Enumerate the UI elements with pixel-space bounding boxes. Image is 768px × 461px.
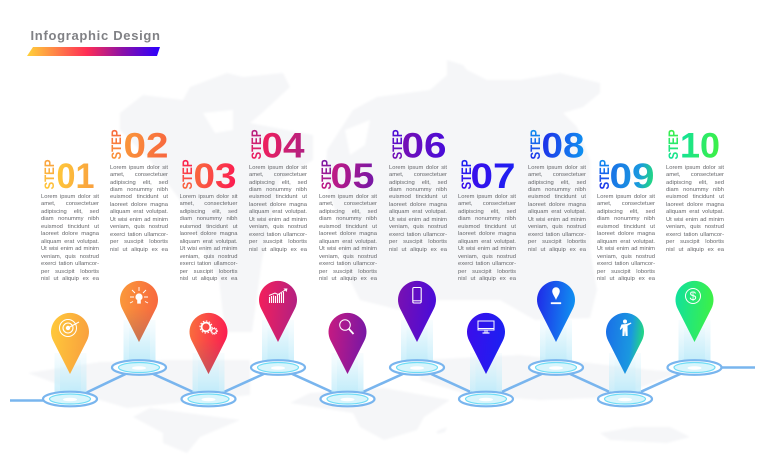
step 8 light beam <box>540 320 572 368</box>
icon: dollar coin: $ <box>690 289 697 303</box>
step 6 text <box>389 165 447 257</box>
step 6 text: veniam, quis nostrud <box>389 224 447 230</box>
step 10 light beam <box>678 320 710 368</box>
step 1 text: amet, consectetuer <box>41 201 99 207</box>
step 8 text: amet, consectetuer <box>528 172 586 178</box>
step 10 text: Ut wisi enim ad minim <box>666 217 724 223</box>
step 3 text: amet, consectetuer <box>180 201 238 207</box>
step 2 text: amet, consectetuer <box>110 172 168 178</box>
timeline track <box>10 368 755 400</box>
step 4 heading: 04 <box>262 126 305 166</box>
step 1 text: nisl ut aliquip ex ea <box>41 276 99 282</box>
step 6 text: per suscipit lobortis <box>389 239 447 245</box>
step 2 text: veniam, quis nostrud <box>110 224 168 230</box>
step 1 text: euismod tincidunt ut <box>41 224 99 230</box>
step 2 heading: 02 <box>124 126 168 166</box>
step 9 text: laoreet dolore magna <box>597 231 655 237</box>
step 5 text: nisl ut aliquip ex ea <box>319 276 377 282</box>
step 2 text <box>110 165 168 257</box>
step 4 text: laoreet dolore magna <box>249 202 307 208</box>
step 8 text <box>528 165 586 257</box>
step 7 text: Lorem ipsum dolor sit <box>458 194 516 200</box>
step 7 text: per suscipit lobortis <box>458 269 516 275</box>
step 10 node <box>668 360 722 375</box>
step 10 text: veniam, quis nostrud <box>666 224 724 230</box>
step 6 text: euismod tincidunt ut <box>389 194 447 200</box>
step 1 text: per suscipit lobortis <box>41 269 99 275</box>
step 9 text: Ut wisi enim ad minim <box>597 246 655 252</box>
step 2 text: euismod tincidunt ut <box>110 194 168 200</box>
step 3 text: Lorem ipsum dolor sit <box>180 194 238 200</box>
step 5 text: adipiscing elit, sed <box>319 209 377 215</box>
step 10 heading: 10 <box>680 126 720 166</box>
step 8 text: nisl ut aliquip ex ea <box>528 247 586 253</box>
step 9 text: nisl ut aliquip ex ea <box>597 276 655 282</box>
step 10 text: adipiscing elit, sed <box>666 180 724 186</box>
step 3 node <box>182 392 236 406</box>
step 8 <box>528 126 586 375</box>
title gradient bar <box>27 47 160 56</box>
step 8 text: exerci tation ullamcor- <box>528 232 586 238</box>
step 7 light beam <box>470 353 502 399</box>
step 7 text: nisl ut aliquip ex ea <box>458 276 516 282</box>
step 5 node <box>320 392 374 406</box>
step 6 pin <box>398 281 436 342</box>
step 6 heading: STEP <box>390 130 405 160</box>
step 8 heading: STEP <box>528 130 543 160</box>
step 6 text: Ut wisi enim ad minim <box>389 217 447 223</box>
step 5 pin <box>328 313 366 374</box>
step 7 text <box>458 194 516 286</box>
step 5 text: Lorem ipsum dolor sit <box>319 194 377 200</box>
step 6 text: aliquam erat volutpat. <box>389 209 447 215</box>
step 6 text: adipiscing elit, sed <box>389 180 447 186</box>
step 5 text: euismod tincidunt ut <box>319 224 377 230</box>
step 2 pin <box>120 281 158 342</box>
step 4 text: amet, consectetuer <box>249 172 307 178</box>
step 10 text: exerci tation ullamcor- <box>666 232 724 238</box>
icon: smartphone <box>413 288 421 303</box>
step 8 text: aliquam erat volutpat. <box>528 209 586 215</box>
step 9 heading: STEP <box>597 160 612 190</box>
step 5 <box>319 157 377 406</box>
step 8 pin <box>537 281 575 342</box>
step 9 <box>597 157 655 406</box>
step 8 node <box>529 360 583 375</box>
step 4 heading <box>249 126 305 166</box>
step 1 pin <box>51 313 89 374</box>
icon: person <box>620 320 631 336</box>
step 10 text: nisl ut aliquip ex ea <box>666 247 724 253</box>
step 6 node <box>390 360 444 375</box>
step 2 text: aliquam erat volutpat. <box>110 209 168 215</box>
step 9 pin <box>606 313 644 374</box>
step 1 text: laoreet dolore magna <box>41 231 99 237</box>
step 2 node <box>112 360 166 375</box>
step 5 text: veniam, quis nostrud <box>319 254 377 260</box>
step 9 heading: 09 <box>610 157 654 196</box>
step 1 light beam <box>54 353 86 399</box>
step 9 heading <box>597 157 654 196</box>
step 2 text: diam nonummy nibh <box>110 187 168 193</box>
step 5 text <box>319 194 377 286</box>
step 1 <box>41 157 99 406</box>
step 4 text: nisl ut aliquip ex ea <box>249 247 307 253</box>
step 3 text: Ut wisi enim ad minim <box>180 246 238 252</box>
step 1 text: Ut wisi enim ad minim <box>41 246 99 252</box>
step 1 text: Lorem ipsum dolor sit <box>41 194 99 200</box>
step 8 heading <box>528 126 584 166</box>
step 3 text: diam nonummy nibh <box>180 216 238 222</box>
icon: gears <box>200 321 217 334</box>
step 6 text: diam nonummy nibh <box>389 187 447 193</box>
step 9 text: aliquam erat volutpat. <box>597 239 655 245</box>
step 9 text: veniam, quis nostrud <box>597 254 655 260</box>
step 8 text: diam nonummy nibh <box>528 187 586 193</box>
step 5 text: diam nonummy nibh <box>319 216 377 222</box>
step 1 node <box>43 392 97 406</box>
step 6 heading <box>390 126 446 166</box>
step 6 text: nisl ut aliquip ex ea <box>389 247 447 253</box>
step 8 text: Ut wisi enim ad minim <box>528 217 586 223</box>
step 4 text: per suscipit lobortis <box>249 239 307 245</box>
step 2 <box>109 126 168 375</box>
step 3 text: aliquam erat volutpat. <box>180 239 238 245</box>
step 2 text: Lorem ipsum dolor sit <box>110 165 168 171</box>
step 10 text: laoreet dolore magna <box>666 202 724 208</box>
step 7 heading <box>459 157 516 196</box>
step 7 pin <box>467 313 505 374</box>
step 3 text: nisl ut aliquip ex ea <box>180 276 238 282</box>
step 10 text: aliquam erat volutpat. <box>666 209 724 215</box>
step 6 text: exerci tation ullamcor- <box>389 232 447 238</box>
icon: growth chart <box>269 288 288 303</box>
step 8 text: euismod tincidunt ut <box>528 194 586 200</box>
step 6 text: laoreet dolore magna <box>389 202 447 208</box>
step 9 text: amet, consectetuer <box>597 201 655 207</box>
step 4 light beam <box>262 320 294 368</box>
step 4 text: veniam, quis nostrud <box>249 224 307 230</box>
step 3 text: euismod tincidunt ut <box>180 224 238 230</box>
step 1 heading: 01 <box>56 157 94 196</box>
step 5 heading: STEP <box>319 160 334 190</box>
step 8 text: veniam, quis nostrud <box>528 224 586 230</box>
step 2 text: adipiscing elit, sed <box>110 180 168 186</box>
step 4 pin <box>259 281 297 342</box>
step 1 text: veniam, quis nostrud <box>41 254 99 260</box>
step 9 text: Lorem ipsum dolor sit <box>597 194 655 200</box>
step 2 light beam <box>124 320 156 368</box>
step 8 text: per suscipit lobortis <box>528 239 586 245</box>
step 3 <box>180 157 238 406</box>
step 7 text: diam nonummy nibh <box>458 216 516 222</box>
step 3 text: exerci tation ullamcor- <box>180 261 238 267</box>
step 5 heading: 05 <box>330 157 374 196</box>
step 2 heading: STEP <box>109 130 124 160</box>
step 10 text: amet, consectetuer <box>666 172 724 178</box>
step 8 text: adipiscing elit, sed <box>528 180 586 186</box>
step 7 text: euismod tincidunt ut <box>458 224 516 230</box>
step 9 text: adipiscing elit, sed <box>597 209 655 215</box>
step 4 text: euismod tincidunt ut <box>249 194 307 200</box>
step 3 light beam <box>192 353 224 399</box>
step 7 text: aliquam erat volutpat. <box>458 239 516 245</box>
step 6 text: amet, consectetuer <box>389 172 447 178</box>
step 2 text: laoreet dolore magna <box>110 202 168 208</box>
step 2 text: nisl ut aliquip ex ea <box>110 247 168 253</box>
step 4 text: diam nonummy nibh <box>249 187 307 193</box>
step 5 light beam <box>332 353 364 399</box>
step 3 pin <box>190 313 228 374</box>
step 7 text: exerci tation ullamcor- <box>458 261 516 267</box>
step 4 text: Lorem ipsum dolor sit <box>249 165 307 171</box>
step 4 heading: STEP <box>249 130 264 160</box>
step 1 text: adipiscing elit, sed <box>41 209 99 215</box>
world map background <box>28 60 690 453</box>
step 9 text: exerci tation ullamcor- <box>597 261 655 267</box>
step 7 heading: STEP <box>459 160 474 190</box>
step 6 text: Lorem ipsum dolor sit <box>389 165 447 171</box>
icon: location marker <box>551 287 561 304</box>
step 7 text: veniam, quis nostrud <box>458 254 516 260</box>
step 9 text: euismod tincidunt ut <box>597 224 655 230</box>
icon: target <box>60 320 79 336</box>
step 8 text: laoreet dolore magna <box>528 202 586 208</box>
step 9 text: diam nonummy nibh <box>597 216 655 222</box>
step 4 <box>249 126 307 375</box>
step 9 text <box>597 194 655 286</box>
step 4 text: Ut wisi enim ad minim <box>249 217 307 223</box>
step 5 text: laoreet dolore magna <box>319 231 377 237</box>
step 3 text: per suscipit lobortis <box>180 269 238 275</box>
step 8 heading: 08 <box>542 126 584 166</box>
step 4 text: adipiscing elit, sed <box>249 180 307 186</box>
step 2 text: per suscipit lobortis <box>110 239 168 245</box>
step 2 heading <box>109 126 168 166</box>
step 5 text: exerci tation ullamcor- <box>319 261 377 267</box>
step 10 text <box>666 165 724 257</box>
step 10 text: per suscipit lobortis <box>666 239 724 245</box>
step 9 node <box>598 392 652 406</box>
step 3 heading: STEP <box>180 160 195 190</box>
step 2 text: Ut wisi enim ad minim <box>110 217 168 223</box>
step 3 text: laoreet dolore magna <box>180 231 238 237</box>
step 1 heading: STEP <box>42 160 57 190</box>
step 8 text: Lorem ipsum dolor sit <box>528 165 586 171</box>
title: Infographic Design <box>30 28 160 43</box>
step 10 text: euismod tincidunt ut <box>666 194 724 200</box>
step 7 heading: 07 <box>470 157 516 196</box>
icon: monitor <box>478 321 494 333</box>
step 4 text: exerci tation ullamcor- <box>249 232 307 238</box>
step 7 text: laoreet dolore magna <box>458 231 516 237</box>
step 6 light beam <box>401 320 433 368</box>
step 10 text: diam nonummy nibh <box>666 187 724 193</box>
step 4 text <box>249 165 307 257</box>
step 6 heading: 06 <box>402 126 446 166</box>
step 3 text: adipiscing elit, sed <box>180 209 238 215</box>
icon: light bulb <box>130 287 148 304</box>
step 1 text: exerci tation ullamcor- <box>41 261 99 267</box>
step 3 heading <box>180 157 236 196</box>
step 10 <box>666 126 724 375</box>
step 3 heading: 03 <box>194 157 236 196</box>
step 10 text: Lorem ipsum dolor sit <box>666 165 724 171</box>
step 5 text: Ut wisi enim ad minim <box>319 246 377 252</box>
step 5 text: amet, consectetuer <box>319 201 377 207</box>
step 7 text: amet, consectetuer <box>458 201 516 207</box>
step 10 heading: STEP <box>666 130 681 160</box>
step 6 <box>389 126 447 375</box>
step 4 node <box>251 360 305 375</box>
icon: magnifier <box>340 320 354 334</box>
step 1 text <box>41 194 99 286</box>
step 3 text <box>180 194 238 286</box>
step 3 text: veniam, quis nostrud <box>180 254 238 260</box>
step 5 text: aliquam erat volutpat. <box>319 239 377 245</box>
step 7 text: adipiscing elit, sed <box>458 209 516 215</box>
step 5 text: per suscipit lobortis <box>319 269 377 275</box>
step 9 light beam <box>609 353 641 399</box>
step 7 <box>458 157 516 406</box>
step 7 text: Ut wisi enim ad minim <box>458 246 516 252</box>
step 4 text: aliquam erat volutpat. <box>249 209 307 215</box>
step 1 text: aliquam erat volutpat. <box>41 239 99 245</box>
step 10 pin <box>676 281 714 342</box>
step 1 text: diam nonummy nibh <box>41 216 99 222</box>
step 7 node <box>459 392 513 406</box>
step 2 text: exerci tation ullamcor- <box>110 232 168 238</box>
step 9 text: per suscipit lobortis <box>597 269 655 275</box>
